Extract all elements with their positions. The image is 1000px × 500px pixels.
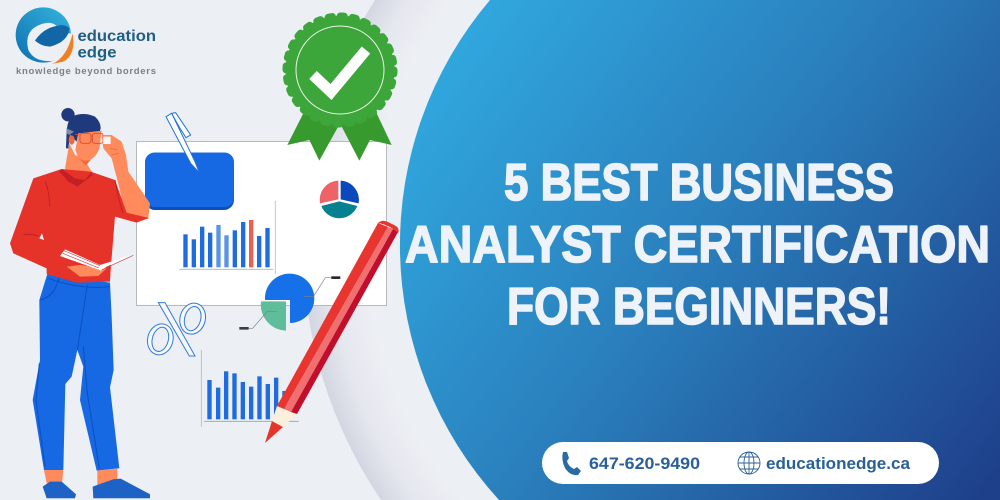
- badge seal: [286, 16, 394, 124]
- title: FOR BEGINNERS!: [507, 278, 891, 336]
- man raised arm and hand: [102, 135, 150, 222]
- phone number: 647-620-9490: [589, 454, 700, 473]
- blue note card: [145, 153, 234, 210]
- icon: globe: [738, 452, 760, 474]
- logo tagline: knowledge beyond borders: [16, 66, 156, 77]
- title: [405, 154, 990, 336]
- logo mark: [16, 7, 75, 65]
- figure: man reading with glasses: [10, 108, 150, 498]
- icon: pen: [166, 113, 199, 173]
- logo: education edge: [16, 7, 156, 77]
- icon: percent sign: [144, 300, 209, 358]
- man red sweater: [10, 169, 149, 283]
- man neck: [65, 143, 92, 182]
- badge ribbons: [287, 113, 392, 161]
- blue gradient circle panel: [400, 0, 1000, 500]
- man ear: [69, 135, 75, 145]
- website: educationedge.ca: [766, 454, 911, 473]
- man glasses: [75, 133, 108, 143]
- man hand holding book: [67, 265, 107, 277]
- man hair: [61, 108, 101, 148]
- panel: white report board: [136, 142, 386, 306]
- icon: red pencil: [265, 221, 399, 443]
- glasses lens glare: [103, 137, 111, 144]
- badge check mark: [313, 50, 366, 92]
- bar chart: on board: [179, 201, 275, 274]
- bar chart: below board: [201, 350, 299, 427]
- man face: [75, 131, 102, 161]
- man jaw shadow: [75, 155, 91, 165]
- small pie chart: [320, 181, 359, 218]
- logo: education edge: edge: [78, 44, 117, 62]
- man legs: blue jeans: [33, 274, 119, 471]
- grey backing circle: [303, 0, 1000, 500]
- exploded pie chart with leader labels: [239, 274, 340, 331]
- open book: [60, 249, 133, 271]
- logo wordmark: education: [78, 28, 156, 45]
- icon: phone: [562, 452, 581, 475]
- contact pill: [542, 442, 939, 484]
- man ankles: [44, 469, 117, 487]
- man shoes: [43, 479, 150, 498]
- icon: certification badge: [286, 16, 394, 161]
- title: 5 BEST BUSINESS: [504, 154, 894, 212]
